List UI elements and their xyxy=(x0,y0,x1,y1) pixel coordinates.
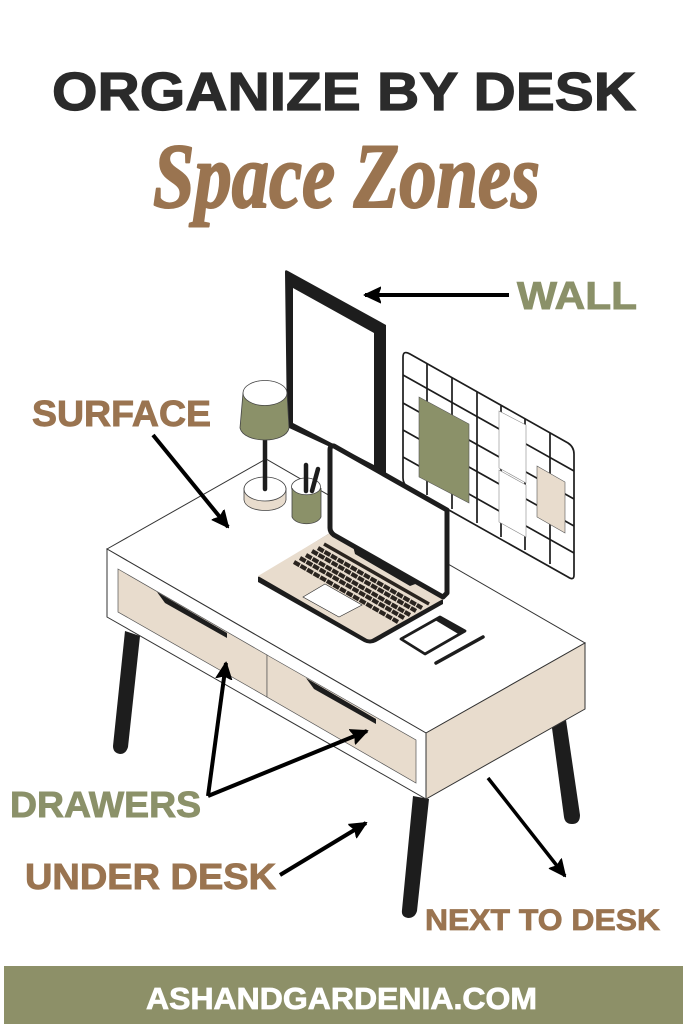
keyboard xyxy=(294,544,429,622)
tablet xyxy=(401,616,466,654)
label: wall: WALL xyxy=(517,275,637,318)
wire grid board xyxy=(403,353,574,579)
lamp xyxy=(240,380,289,510)
desk xyxy=(107,459,585,918)
footer bar xyxy=(4,966,683,1024)
drawer left xyxy=(118,569,267,697)
screen xyxy=(330,446,447,597)
handle right xyxy=(306,678,376,724)
hinge xyxy=(353,546,418,586)
back leg right xyxy=(552,720,580,824)
label: surface: SURFACE xyxy=(32,393,211,434)
handle left xyxy=(157,592,227,638)
front face xyxy=(107,549,426,799)
label: next to desk: NEXT TO DESK xyxy=(425,904,660,937)
pen cup xyxy=(292,465,321,524)
arrows: drawers xyxy=(208,663,367,796)
arrow: under desk xyxy=(280,823,366,875)
white card lower xyxy=(499,470,526,537)
lamp pole xyxy=(263,438,267,489)
arrow: next to desk xyxy=(488,778,565,876)
laptop xyxy=(258,446,447,644)
beige card xyxy=(537,466,565,533)
lamp shade xyxy=(240,393,289,440)
lamp base xyxy=(244,488,286,510)
footer website: ASHANDGARDENIA.COM xyxy=(146,981,537,1016)
green card xyxy=(419,397,469,503)
wall frame xyxy=(285,270,386,473)
back leg left xyxy=(113,631,140,754)
script subtitle: Space Zones xyxy=(153,125,540,227)
drawer right xyxy=(267,655,416,783)
white card upper xyxy=(499,411,526,483)
arrow: wall xyxy=(365,293,509,297)
front leg xyxy=(402,796,429,918)
laptop base xyxy=(258,533,443,644)
label: drawers: DRAWERS xyxy=(10,784,201,825)
label: under desk: UNDER DESK xyxy=(25,856,276,897)
title: ORGANIZE BY DESK xyxy=(52,62,636,122)
stylus xyxy=(436,637,483,663)
desk top xyxy=(107,459,585,733)
side face xyxy=(426,643,585,799)
trackpad xyxy=(303,584,362,617)
arrow: surface xyxy=(153,435,228,527)
